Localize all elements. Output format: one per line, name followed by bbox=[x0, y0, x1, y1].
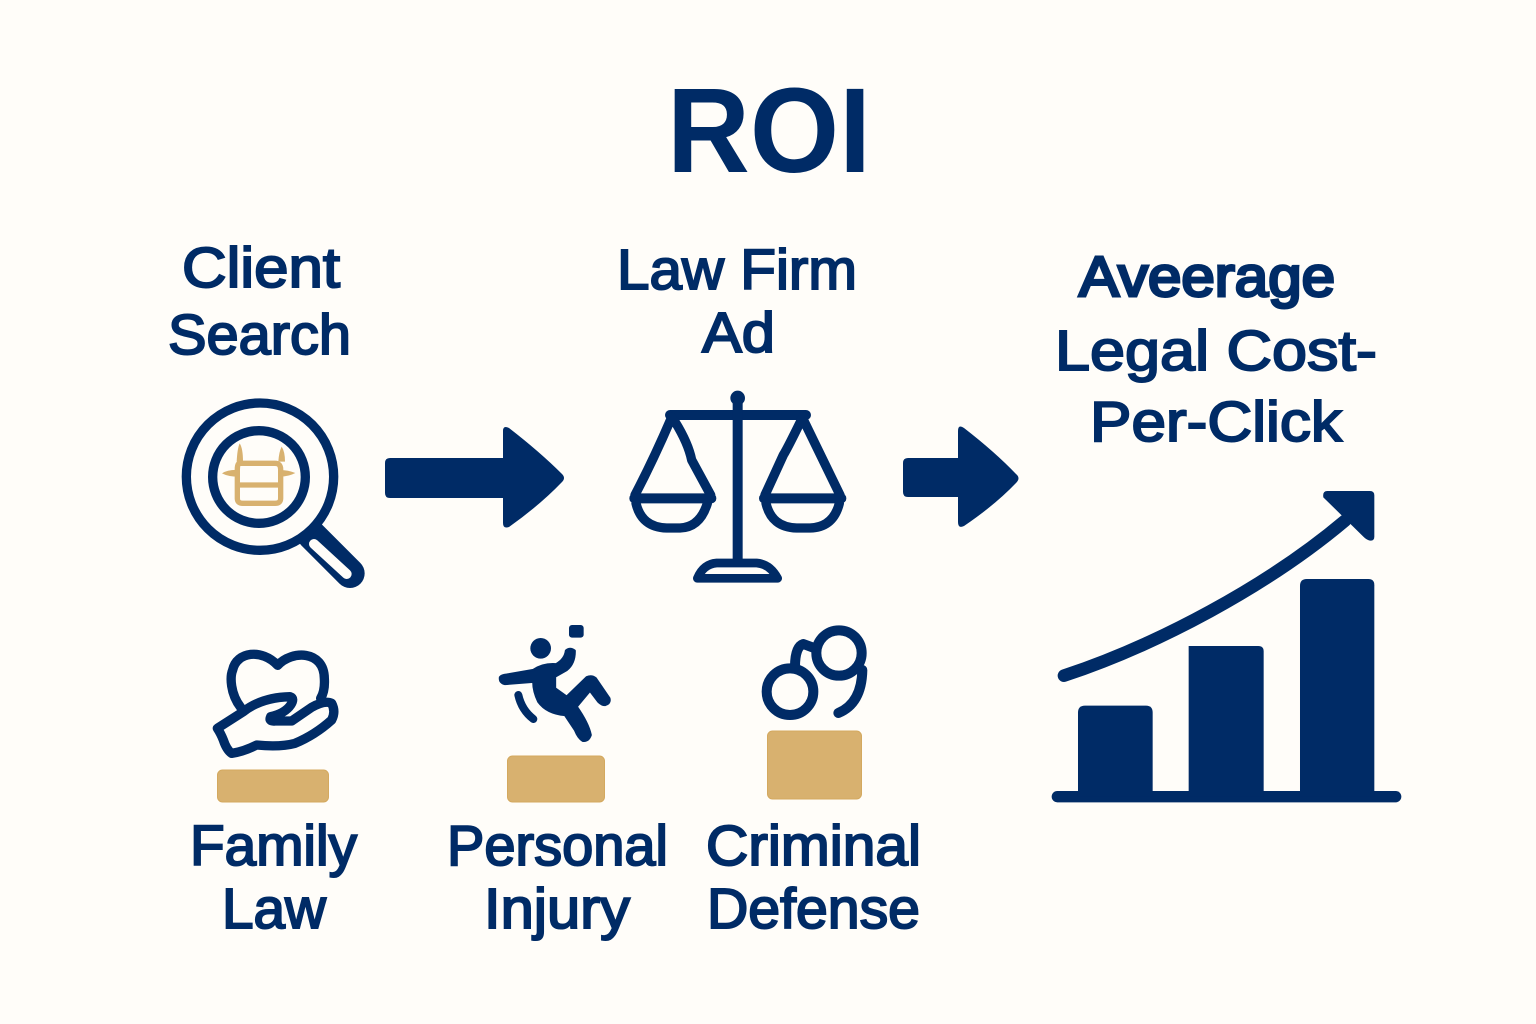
body bbox=[500, 649, 610, 741]
heading: client search: Client bbox=[182, 236, 340, 300]
label: personal injury: Personal bbox=[447, 814, 668, 878]
head bbox=[530, 638, 551, 659]
bar 2 bbox=[1189, 646, 1264, 797]
falling object bbox=[569, 625, 584, 638]
heading: law firm ad: Ad bbox=[702, 301, 775, 365]
bar 3 bbox=[1300, 579, 1374, 797]
block: family law bbox=[218, 770, 328, 802]
left pan bbox=[634, 417, 711, 528]
title: ROI bbox=[667, 62, 871, 198]
icon: falling person bbox=[500, 625, 610, 741]
heading: client search bbox=[168, 236, 351, 367]
icon: gold building symbol bbox=[222, 443, 295, 503]
right pan bbox=[764, 417, 841, 528]
block: personal injury bbox=[508, 756, 604, 802]
icon: heart in hand bbox=[217, 654, 334, 753]
icon: scales of justice bbox=[634, 391, 841, 578]
heading: client search: Search bbox=[168, 303, 351, 367]
heading: average legal cost-per-click: Legal Cost- bbox=[1055, 319, 1377, 383]
label: family law bbox=[190, 814, 357, 941]
label: family law: Law bbox=[222, 877, 327, 941]
icon: magnifying glass bbox=[186, 403, 350, 574]
icon: handcuffs bbox=[767, 630, 862, 715]
label: family law: Family bbox=[190, 814, 357, 878]
block: criminal defense bbox=[768, 731, 862, 799]
heading: law firm ad bbox=[617, 238, 857, 365]
label: personal injury: Injury bbox=[484, 877, 631, 941]
arrow: ad to cost-per-click bbox=[903, 427, 1018, 527]
scale base bbox=[697, 563, 778, 578]
chart baseline bbox=[1057, 780, 1396, 814]
motion lines bbox=[518, 695, 533, 719]
label: personal injury bbox=[447, 814, 668, 941]
heading: law firm ad: Law Firm bbox=[617, 238, 857, 302]
heading: average legal cost-per-click: Per-Click bbox=[1090, 390, 1343, 454]
label: criminal defense bbox=[706, 814, 921, 941]
growth arrow bbox=[1064, 491, 1374, 676]
bar 1 bbox=[1078, 706, 1153, 797]
label: criminal defense: Defense bbox=[707, 877, 920, 941]
heading: average legal cost-per-click: Aveerage bbox=[1079, 245, 1335, 309]
heading: average legal cost-per-click bbox=[1055, 245, 1377, 454]
arrow: search to ad bbox=[385, 427, 564, 528]
bar chart with growth arrow bbox=[1057, 491, 1396, 797]
label: criminal defense: Criminal bbox=[706, 814, 921, 878]
